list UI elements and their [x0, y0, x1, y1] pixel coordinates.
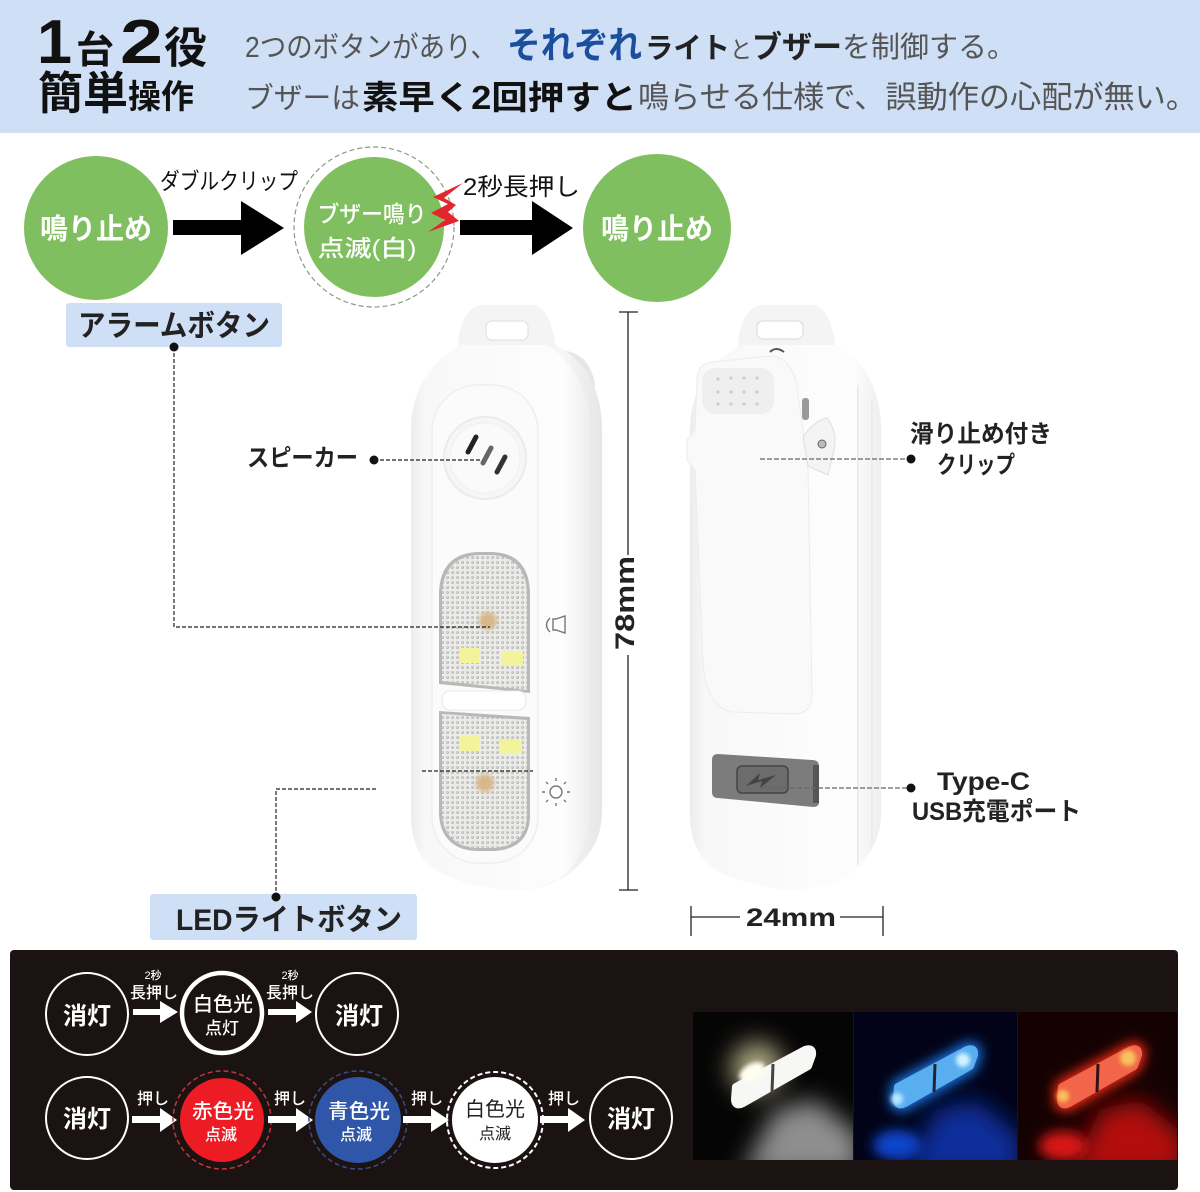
state: off: [590, 1077, 672, 1159]
arrow: [268, 1108, 313, 1132]
lens: alarm button: [439, 552, 530, 693]
label: alarm button: アラームボタン: [78, 310, 270, 343]
alarm button flow: [24, 147, 731, 307]
header description line 2: 鳴らせる仕様で、誤動作の心配が無い。: [638, 80, 1197, 115]
label: 2 second press: 2秒長押し: [463, 174, 580, 201]
state: off: 消灯: [335, 1003, 383, 1030]
hanging loop: [737, 305, 836, 352]
press label: 2秒: [281, 968, 299, 982]
arrow: [173, 201, 284, 255]
label: speaker: [247, 445, 480, 472]
lens: light button: [439, 711, 530, 851]
title: 1台2役 簡単操作: [37, 8, 207, 119]
header description line 2: [245, 79, 1197, 116]
state circle: silent: [583, 154, 731, 302]
title: 1台2役 簡単操作: 簡単: [38, 68, 128, 119]
device back: [687, 305, 881, 890]
state: white on: 白色光: [193, 993, 253, 1016]
clip pivot: [803, 418, 835, 475]
row 1 flow: [46, 968, 398, 1055]
title: 1台2役 簡単操作: 操作: [128, 78, 194, 115]
label: double click: ダブルクリップ: [160, 168, 298, 194]
speaker: [444, 417, 526, 499]
label: LED light button: [150, 771, 533, 940]
row 2 flow: [46, 1071, 672, 1169]
state circle: silent: [24, 156, 168, 300]
side shell: [520, 345, 602, 890]
icon: sun: [542, 778, 570, 806]
header description line 1: と: [730, 37, 752, 64]
state: white blink: 点滅: [479, 1125, 511, 1143]
state: blue blink: 点滅: [340, 1126, 372, 1144]
press label: 押し: [137, 1090, 169, 1108]
arrow: [403, 1108, 449, 1132]
press label: 長押し: [266, 984, 314, 1002]
panel: LED modes: [10, 950, 1185, 1190]
state: off: 消灯: [63, 1003, 111, 1030]
shell: [690, 345, 881, 890]
dimension: 24mm: [691, 904, 883, 936]
title: 1台2役 簡単操作: 台: [76, 30, 114, 72]
state: off: [46, 973, 128, 1055]
press label: 押し: [548, 1090, 580, 1108]
state: red blink: 赤色光: [192, 1100, 254, 1123]
state: white blink: [447, 1072, 543, 1168]
arrow: [460, 201, 573, 255]
header description line 2: ブザーは: [245, 82, 360, 115]
hanging loop: [457, 305, 556, 352]
press label: [266, 968, 314, 1002]
label: non-slip clip: クリップ: [937, 452, 1015, 479]
label: alarm button: [66, 303, 490, 627]
label: non-slip clip: [760, 421, 1052, 479]
header description line 1: それぞれ: [507, 25, 642, 66]
dimension: 24mm: 24mm: [746, 904, 836, 932]
title: 1台2役 簡単操作: 2: [120, 8, 163, 77]
label: Type-C USB port: USB充電ポート: [912, 798, 1081, 826]
usb charge port: [712, 754, 819, 807]
dimension: 78mm: [610, 312, 640, 890]
label: non-slip clip: 滑り止め付き: [910, 421, 1052, 448]
state circle: silent: 鳴り止め: [601, 213, 713, 246]
clip behind: [560, 350, 595, 400]
state: off: [316, 973, 398, 1055]
state: off: [46, 1077, 128, 1159]
press label: 長押し: [130, 984, 178, 1002]
label: speaker: スピーカー: [247, 445, 358, 472]
press label: 押し: [411, 1090, 443, 1108]
label: LED light button: LEDライトボタン: [176, 904, 402, 937]
press label: 2秒: [144, 968, 162, 982]
title: 1台2役 簡単操作: 1: [37, 8, 72, 77]
state: white on: 点灯: [205, 1019, 239, 1038]
header description line 1: 2つのボタンがあり、: [245, 31, 497, 64]
state: off: 消灯: [63, 1106, 111, 1133]
label: Type-C USB port: [762, 768, 1081, 826]
icon: lightning bolt: [428, 183, 463, 232]
state circle: buzzer sounding: 点滅(白): [318, 235, 416, 261]
dimension: 78mm: 78mm: [610, 556, 640, 650]
front shell: [411, 345, 590, 890]
header description line 2: 素早く2回押すと: [362, 79, 637, 116]
arrow: [132, 1108, 177, 1132]
photo: blue light: [854, 1012, 1017, 1160]
arrow: [540, 1108, 585, 1132]
state: off: 消灯: [607, 1106, 655, 1133]
state: blue blink: [309, 1071, 407, 1169]
press label: 押し: [274, 1090, 306, 1108]
state circle: silent: 鳴り止め: [40, 213, 152, 246]
title: 1台2役 簡単操作: 役: [164, 25, 207, 73]
state: blue blink: 青色光: [328, 1100, 390, 1123]
state circle: buzzer sounding: [294, 147, 454, 307]
state: red blink: 点滅: [205, 1126, 237, 1144]
state: white blink: 白色光: [465, 1098, 525, 1121]
arrow: [133, 1001, 178, 1023]
header band: [0, 0, 1200, 133]
label: Type-C USB port: Type-C: [937, 768, 1030, 796]
arrow: [268, 1001, 312, 1023]
device front: [411, 305, 602, 890]
header description line 1: [245, 25, 1016, 66]
state circle: buzzer sounding: ブザー鳴り: [318, 201, 426, 227]
photo: white light: [693, 1012, 853, 1160]
header description line 1: ブザー: [752, 30, 842, 65]
icon: bell: [546, 616, 565, 633]
press label: [130, 968, 178, 1002]
state: red blink: [173, 1071, 271, 1169]
clip: [687, 349, 835, 714]
header description line 1: を制御する。: [842, 31, 1016, 64]
clip grip dimples: [702, 368, 774, 414]
divider: [442, 691, 526, 710]
header description line 1: ライト: [645, 33, 730, 65]
state: white on: [182, 973, 262, 1053]
photo: red light: [1018, 1012, 1177, 1160]
